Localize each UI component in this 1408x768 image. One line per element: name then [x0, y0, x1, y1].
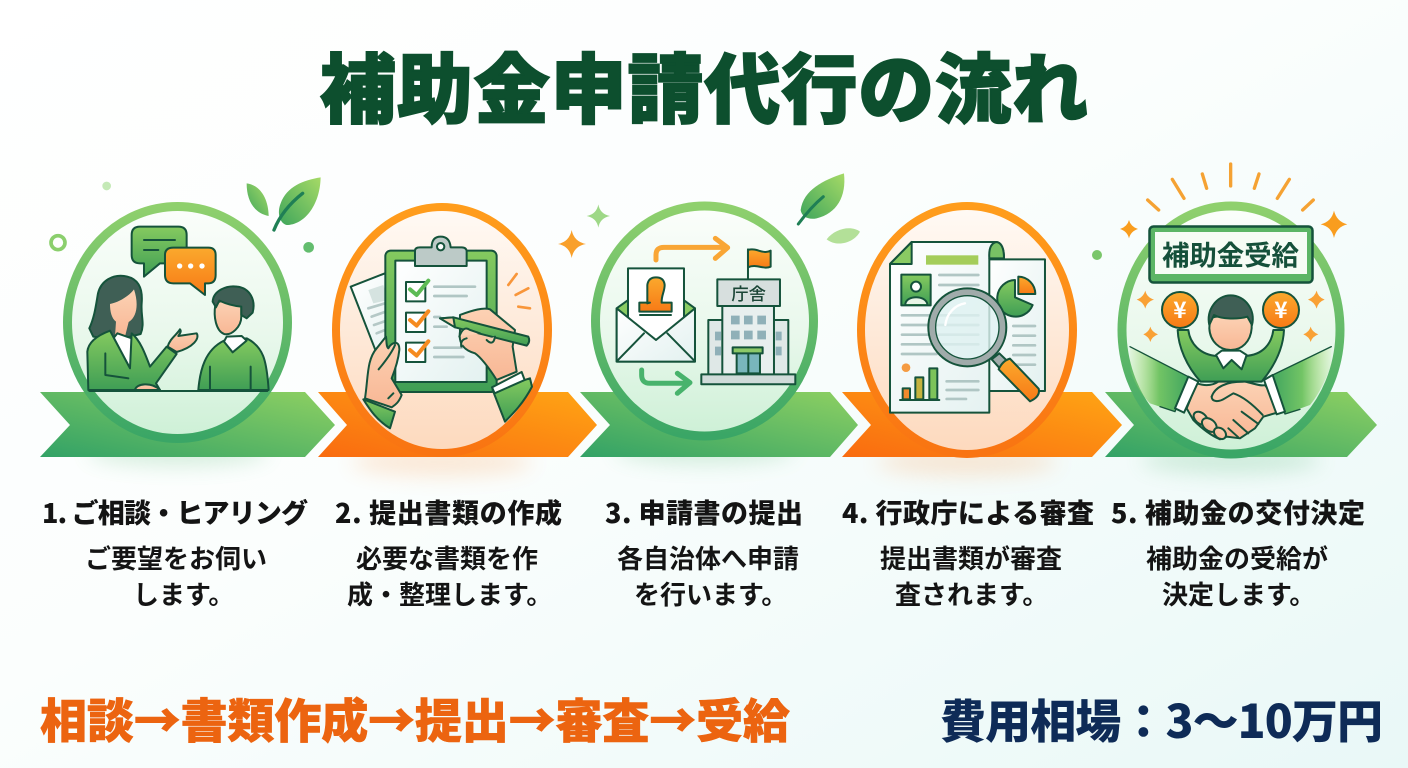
man [198, 286, 269, 390]
step 2 description: 成・整理します。 [347, 575, 552, 612]
decorative sparkles and leaves 3 [558, 173, 860, 258]
person head [1209, 295, 1253, 350]
orange arrow [656, 238, 728, 260]
collar [1216, 351, 1247, 369]
circle 3 [596, 206, 814, 436]
back sheet with pie chart [987, 259, 1045, 391]
arrow banner 5 [1105, 392, 1377, 457]
icon: envelope, stamp, arrows and government building [617, 238, 795, 393]
orange speech bubble [165, 248, 216, 295]
circle 2 [336, 207, 548, 453]
step 3 heading: 3. 申請書の提出 [605, 492, 803, 531]
icon: clipboard and writing hands [351, 237, 532, 428]
step 2 illustration [318, 207, 597, 457]
step 5 description: 決定します。 [1162, 575, 1315, 612]
clipboard [385, 237, 497, 392]
step 4 description: 査されます。 [895, 575, 1048, 612]
left hand [363, 337, 402, 428]
table line [89, 388, 267, 394]
decorative dot [1092, 250, 1102, 260]
government building: 庁舎 [731, 280, 766, 305]
handshake [1175, 375, 1285, 441]
green speech bubble [132, 227, 187, 277]
step 2 heading: 2. 提出書類の作成 [335, 492, 562, 531]
circle 4 [861, 206, 1073, 454]
step 4 caption [842, 492, 1094, 612]
decorative leaves and dots 1 [51, 177, 321, 253]
step 2 description: 必要な書類を作 [356, 539, 538, 576]
circle 5 [1122, 206, 1340, 454]
step 1 description: ご要望をお伺い [85, 539, 267, 576]
orange ticks [508, 274, 530, 308]
circle 1 [68, 206, 288, 438]
step 3 illustration [558, 173, 860, 457]
sleeves [1130, 347, 1331, 414]
yen coins: ¥ [1274, 292, 1288, 325]
person body [1178, 330, 1284, 382]
check list [406, 281, 475, 362]
step 1 description: します。 [133, 575, 234, 612]
arrow banner 3 [580, 392, 858, 457]
step 4 description: 提出書類が審査 [880, 539, 1062, 576]
step 3 description: を行います。 [634, 575, 787, 612]
icon: person with coins and handshake [1130, 292, 1331, 441]
step 1 illustration [40, 177, 335, 457]
title: 補助金申請代行の流れ [320, 29, 1088, 139]
arrow banner 4 [842, 392, 1122, 457]
front document [890, 242, 1004, 413]
envelope with stamp [617, 268, 695, 362]
back paper [351, 273, 410, 353]
icon: two people talking [87, 227, 269, 391]
sign: 補助金受給: 補助金受給 [1162, 233, 1300, 273]
magnifying glass [928, 288, 1039, 401]
arrow banner 1 [40, 392, 335, 457]
yen coins: ¥ [1173, 292, 1187, 325]
arrow banner 2 [318, 392, 597, 457]
step 4 illustration [842, 206, 1122, 457]
green arrow [642, 370, 690, 393]
step 5 illustration [1105, 164, 1377, 457]
cost summary: 費用相場：3〜10万円 [940, 686, 1383, 752]
yen coins [1162, 292, 1299, 328]
step 5 caption [1111, 492, 1365, 612]
step 5 description: 補助金の受給が [1146, 539, 1328, 576]
icon: documents and magnifier [890, 242, 1045, 413]
step 1 caption [42, 492, 308, 612]
step 2 caption [335, 492, 562, 612]
step 3 caption [605, 492, 803, 612]
step 1 heading: 1. ご相談・ヒアリング [42, 492, 308, 531]
woman [87, 276, 197, 390]
right hand and pen [440, 309, 532, 422]
flow summary: 相談→書類作成→提出→審査→受給 [40, 683, 790, 752]
sign: 補助金受給 [1150, 226, 1312, 282]
icon: sun rays and sparkles [1120, 164, 1347, 342]
step 3 description: 各自治体へ申請 [617, 539, 799, 576]
soft shadows [88, 436, 1321, 476]
government building [701, 249, 795, 384]
step 5 heading: 5. 補助金の交付決定 [1111, 492, 1365, 531]
step 4 heading: 4. 行政庁による審査 [842, 492, 1094, 531]
